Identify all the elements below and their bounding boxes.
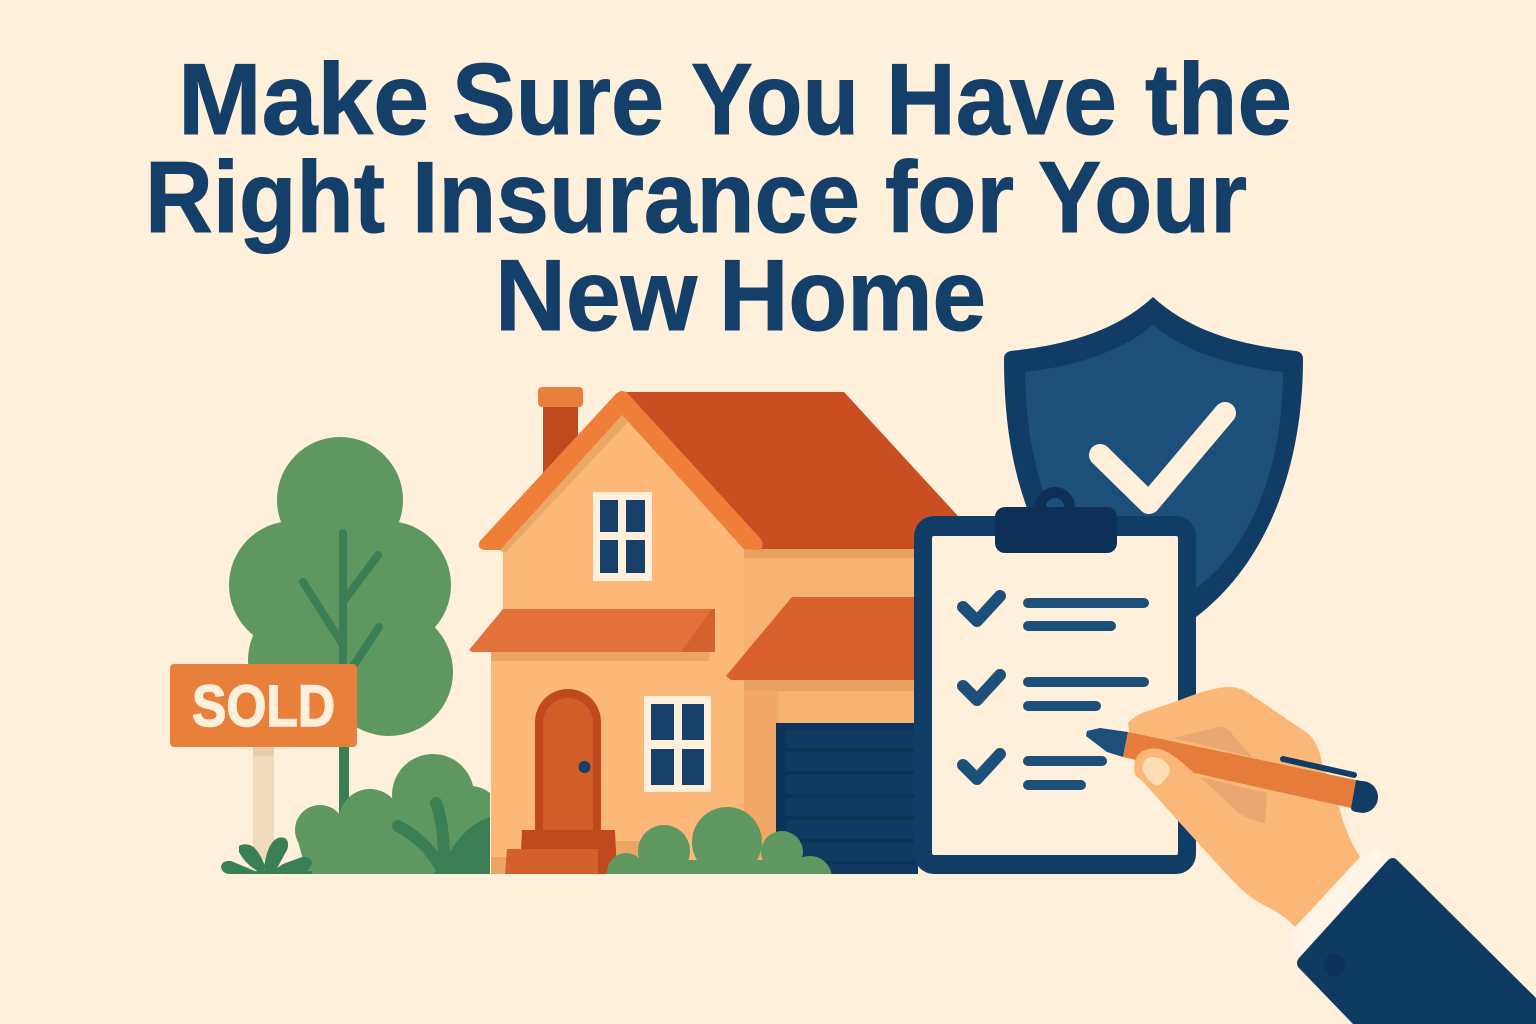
clipboard clip [995, 487, 1117, 553]
title: the [1145, 44, 1292, 156]
title: Your [1038, 142, 1247, 254]
title: Sure [452, 44, 664, 156]
title: You [691, 44, 859, 156]
garage door [776, 723, 918, 874]
title: New [495, 240, 697, 352]
thumb [1134, 748, 1215, 830]
icon: shield with check [1004, 297, 1303, 640]
right wing wall [744, 549, 916, 874]
hand shading [1173, 727, 1267, 823]
sold sign: SOLD [192, 674, 335, 739]
chimney [538, 387, 583, 477]
pen [1086, 728, 1378, 813]
door [535, 689, 601, 832]
icon: front bush [607, 807, 832, 874]
cuff [1288, 846, 1394, 958]
main wall [491, 415, 744, 874]
clipboard [914, 487, 1196, 874]
title: Home [719, 240, 986, 352]
title [145, 44, 1292, 352]
lower window [644, 696, 711, 792]
sleeve [1297, 858, 1536, 1024]
door steps [505, 830, 617, 874]
icon: tree [229, 437, 453, 820]
icon: small plant [221, 837, 312, 874]
gable trim [479, 391, 763, 550]
hand with pen [1086, 687, 1536, 1024]
awning [469, 609, 715, 661]
title: for [885, 142, 1014, 254]
title: Insurance [412, 142, 860, 254]
upper window [593, 492, 652, 581]
garage roof [726, 597, 916, 680]
hand [1128, 687, 1360, 927]
title: Make [178, 44, 429, 156]
title: Right [145, 142, 385, 254]
house [469, 387, 960, 874]
icon: left bush [295, 754, 502, 876]
checklist marks [963, 596, 1144, 785]
sold sign [170, 664, 357, 860]
main roof [626, 392, 960, 549]
title: Have [886, 44, 1117, 156]
